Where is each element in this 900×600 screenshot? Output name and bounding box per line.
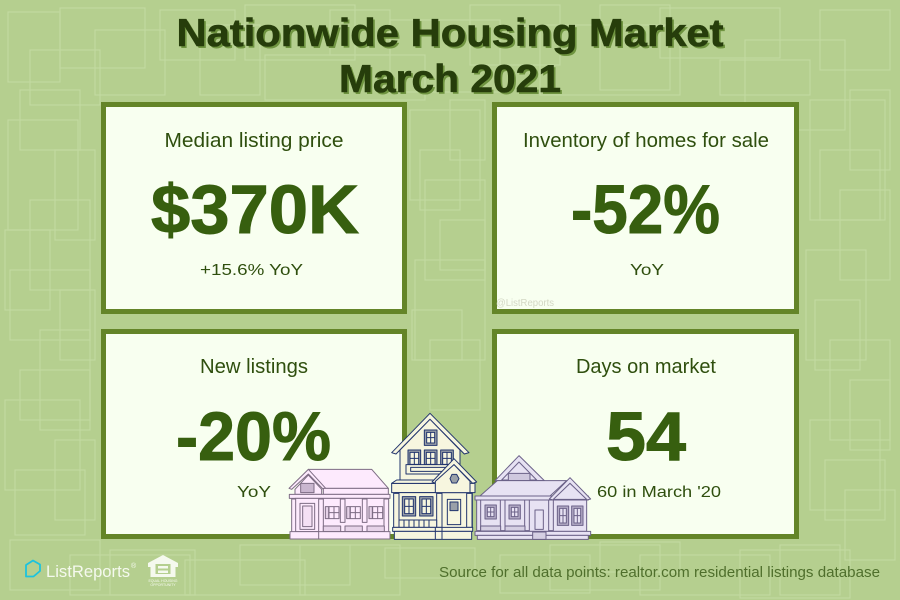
panel: new listings [104, 332, 404, 536]
icon: lilac house [475, 456, 591, 539]
change: +15.6% YoY: +15.6% YoY [200, 262, 303, 279]
title [176, 12, 726, 103]
title: Nationwide Housing Market [176, 12, 724, 55]
icon: pink house [289, 469, 390, 539]
value: -20%: -20% [176, 398, 331, 475]
label: median listing price: Median listing price [164, 130, 344, 152]
panel: days on market [494, 332, 796, 536]
panel: median listing price [104, 104, 404, 312]
logo: equal housing opportunity: OPPORTUNITY [150, 583, 176, 587]
label: new listings: New listings [200, 356, 308, 378]
change: YoY: YoY [630, 262, 664, 279]
title: Nationwide Housing Market [178, 14, 726, 57]
logo: equal housing opportunity [148, 555, 178, 587]
panel: inventory of homes for sale [494, 104, 796, 312]
title: March 2021 [341, 60, 563, 103]
logo: ListReports: ListReports [46, 562, 130, 581]
change: YoY: YoY [237, 484, 271, 501]
value: -52%: -52% [571, 171, 720, 248]
value: $370K: $370K [151, 171, 359, 248]
icon: cream house [392, 413, 477, 539]
source note: Source for all data points: realtor.com residential listings database [439, 565, 880, 581]
label: days on market: Days on market [576, 356, 716, 378]
logo: equal housing opportunity: EQUAL HOUSING [148, 579, 178, 583]
icon: ListReports mark [26, 560, 40, 576]
label: inventory: Inventory of homes for sale [523, 130, 769, 152]
comparison: 60 in March '20: 60 in March '20 [597, 484, 721, 501]
watermark: #ListReports: @ListReports [496, 297, 554, 309]
logo: ListReports: ® [131, 562, 137, 570]
title: March 2021 [339, 58, 561, 101]
illustration: row of houses [289, 413, 591, 539]
value: 54: 54 [606, 398, 686, 475]
